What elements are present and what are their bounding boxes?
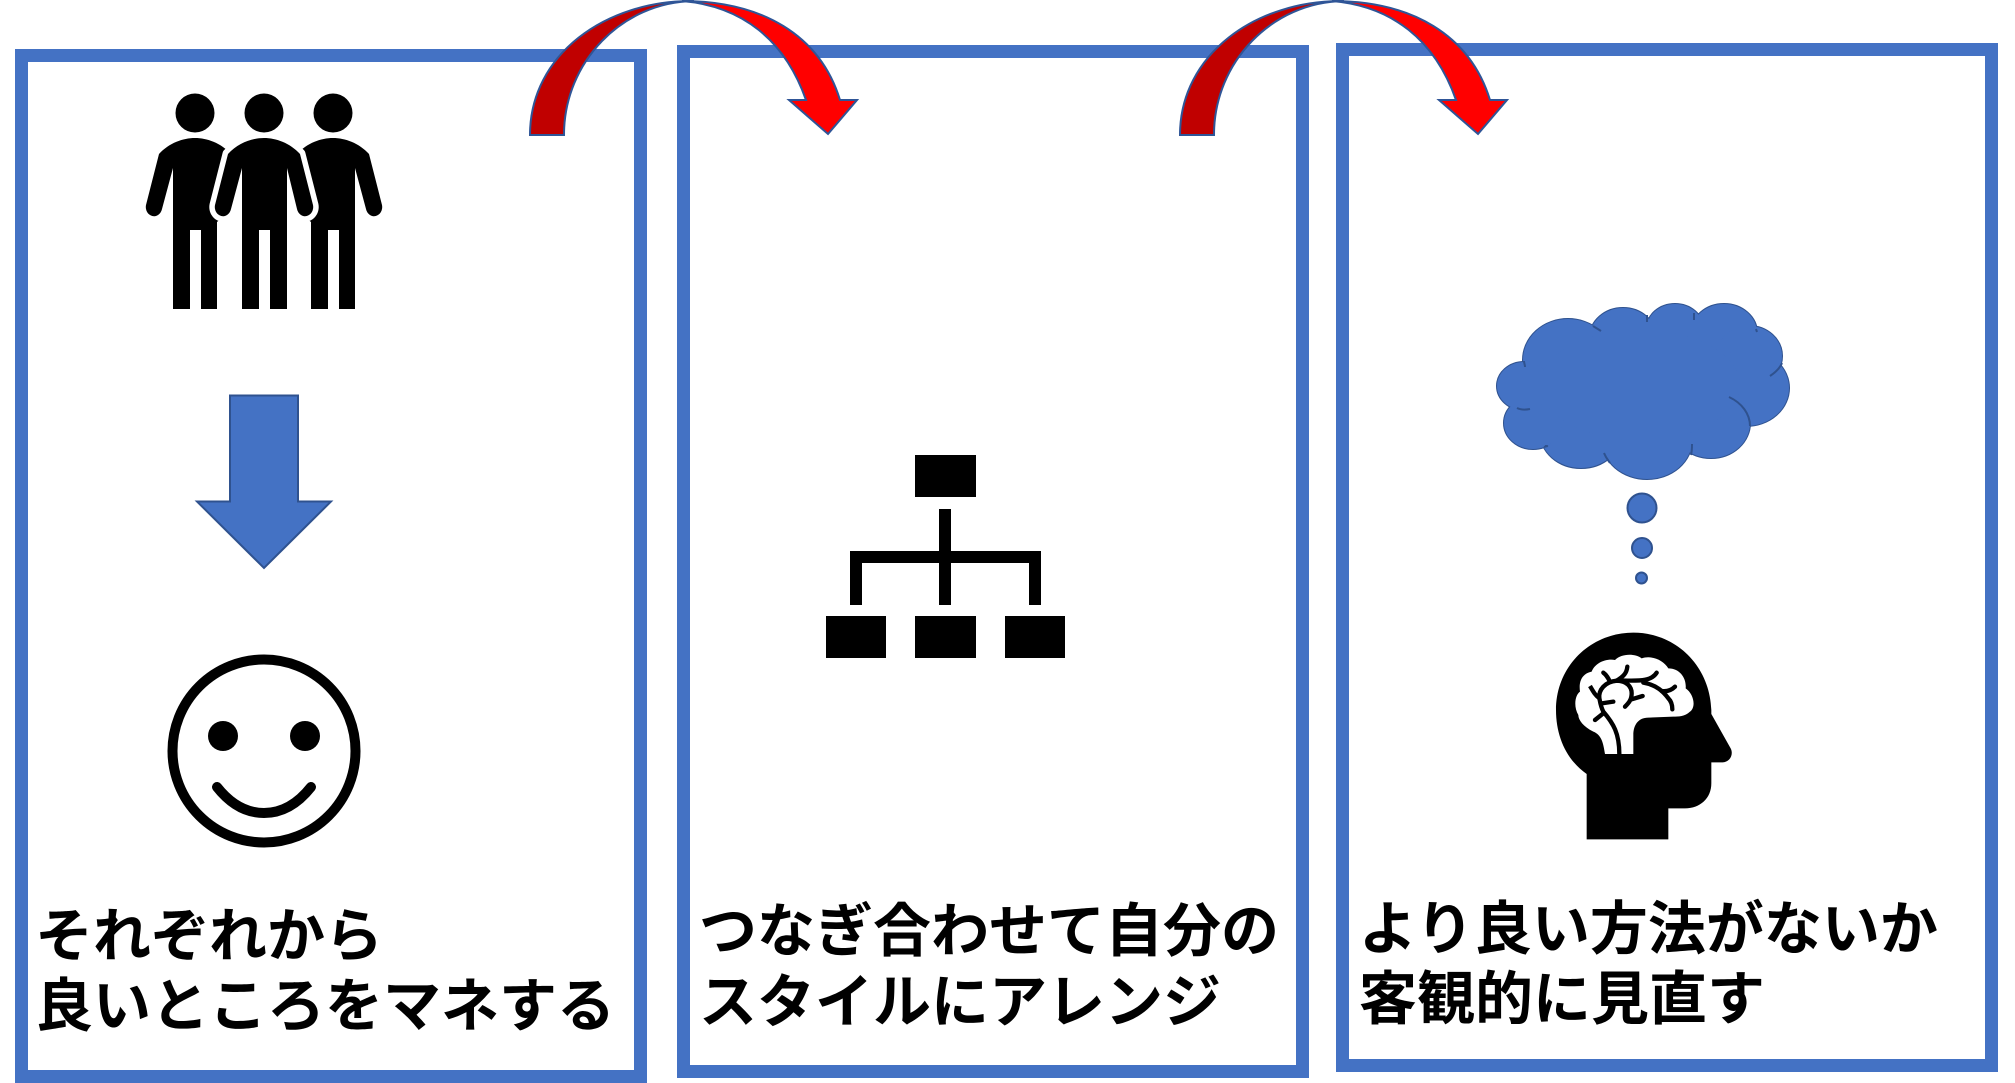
text: panel 1 caption: 良いところをマネする xyxy=(35,974,615,1039)
icon: smiley face xyxy=(172,660,356,842)
arrow: curved arrow from panel 2 to panel 3 xyxy=(1180,1,1507,135)
text: panel 2 caption xyxy=(699,899,1279,1035)
text: panel 3 caption: より良い方法がないか xyxy=(1359,897,1938,962)
panel frame 1 xyxy=(22,56,640,1076)
text: panel 2 caption: スタイルにアレンジ xyxy=(699,970,1221,1035)
text: panel 3 caption xyxy=(1359,897,1938,1032)
panel frame 2 xyxy=(684,52,1302,1072)
text: panel 1 caption xyxy=(35,904,615,1039)
icon: head with brain xyxy=(1556,633,1732,839)
icon: thought bubbles xyxy=(1628,494,1656,584)
panel: arrange into own style xyxy=(684,52,1302,1072)
panel: review objectively xyxy=(1342,50,1992,1066)
icon: thought cloud xyxy=(1497,304,1789,584)
arrow: blue down arrow xyxy=(197,396,331,568)
icon: three people xyxy=(146,94,382,309)
icon: organisation chart xyxy=(826,455,1065,658)
text: panel 1 caption: それぞれから xyxy=(35,904,383,969)
text: panel 2 caption: つなぎ合わせて自分の xyxy=(699,899,1279,964)
text: panel 3 caption: 客観的に見直す xyxy=(1359,967,1765,1032)
panel frame 3 xyxy=(1342,50,1992,1066)
arrow: curved arrow from panel 1 to panel 2 xyxy=(530,1,857,135)
panel: imitate the good points xyxy=(22,56,640,1076)
